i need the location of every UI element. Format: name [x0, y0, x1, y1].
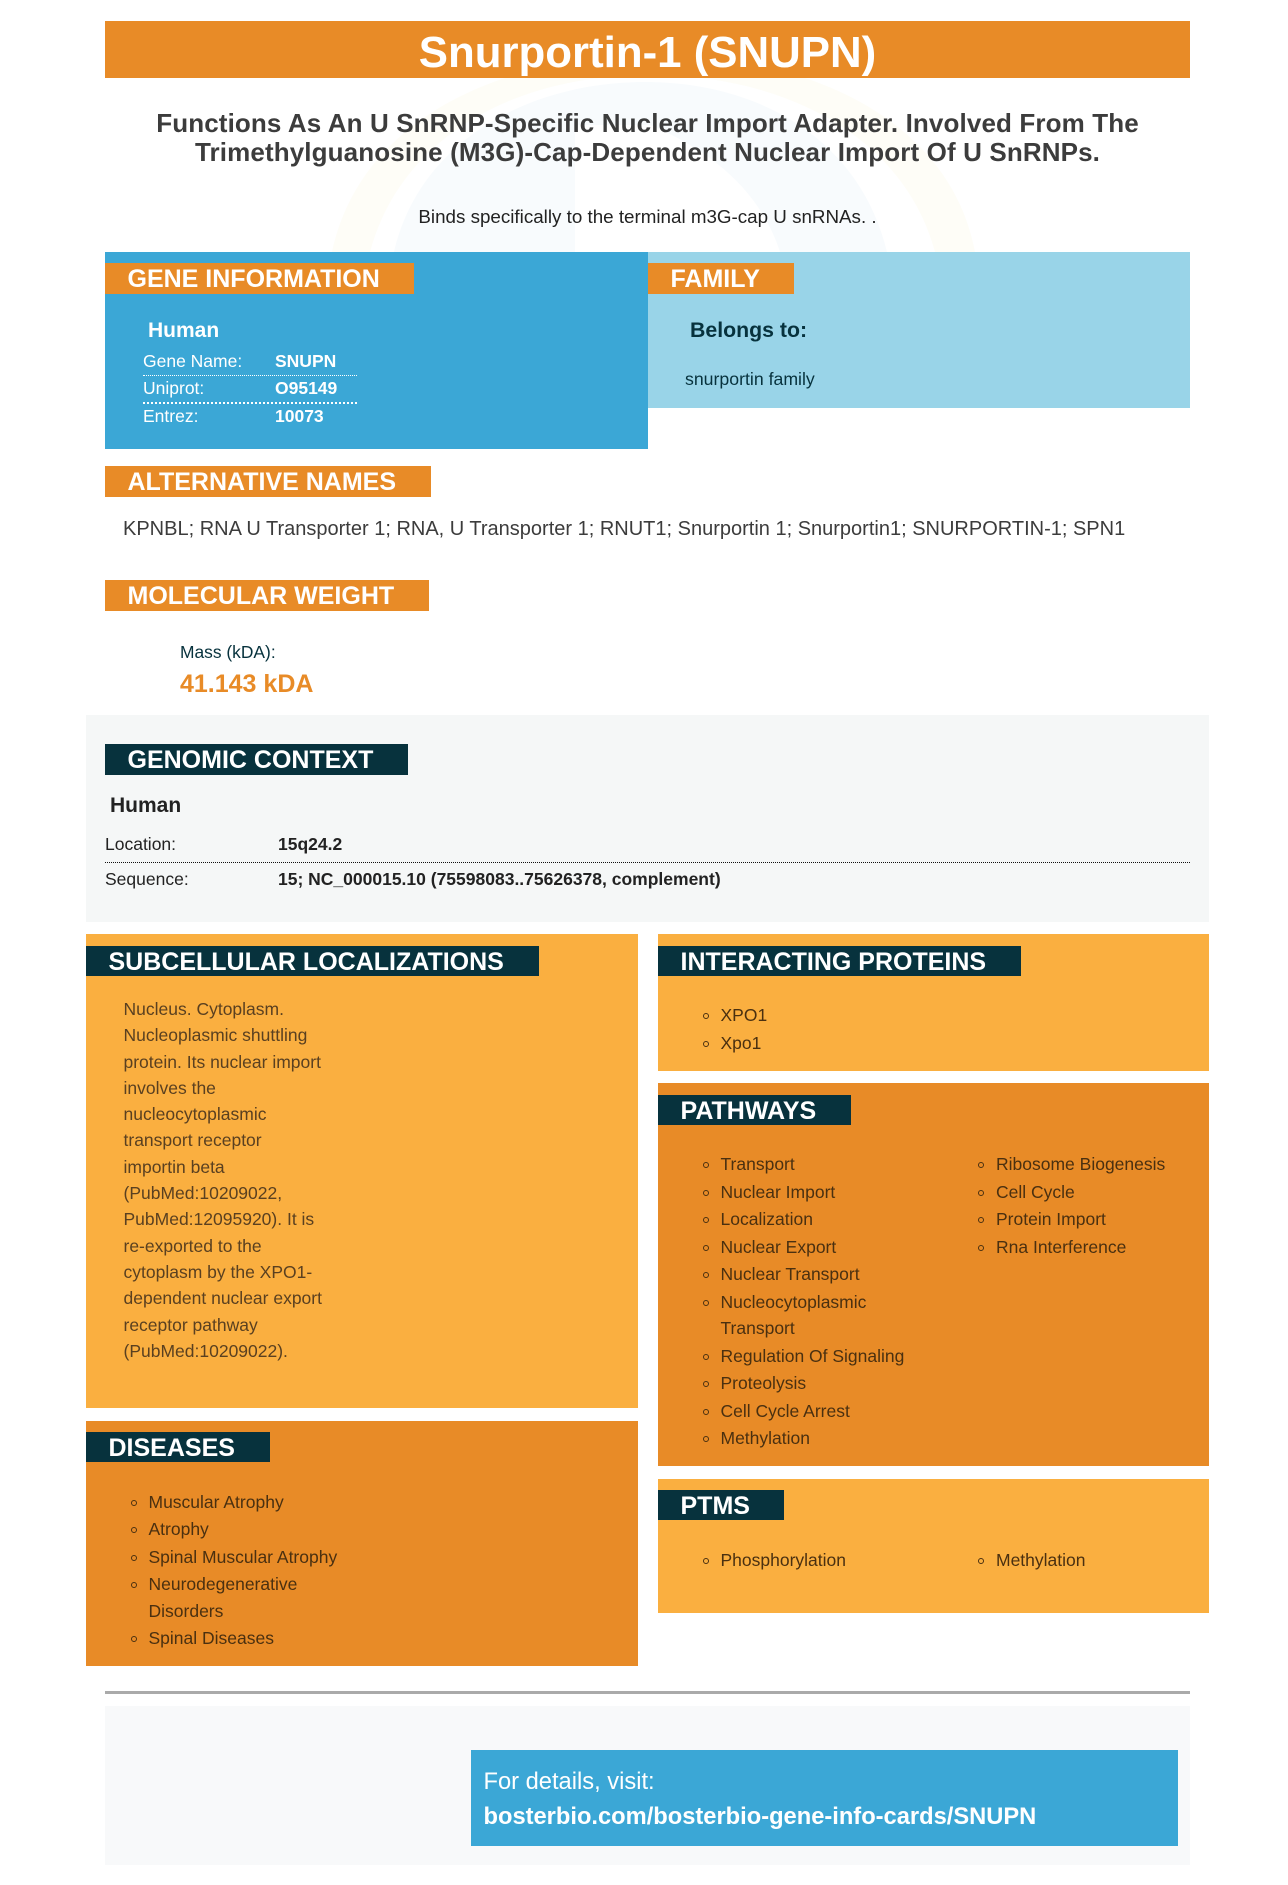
- heading: gene information: GENE INFORMATION: [128, 265, 380, 293]
- heading: family: [648, 263, 794, 294]
- heading: family: FAMILY: [670, 265, 760, 293]
- heading: pathways: PATHWAYS: [680, 1097, 816, 1125]
- gene rows: O95149: [275, 378, 337, 398]
- localization text: involves the: [124, 1078, 216, 1098]
- subtitle: [156, 108, 1139, 166]
- pathway list column 1: Nuclear Export: [720, 1237, 836, 1257]
- callout url: bosterbio.com/bosterbio-gene-info-cards/SNUPN: [484, 1804, 1036, 1830]
- heading: pathways: [658, 1095, 851, 1125]
- protein list: XPO1: [720, 1005, 767, 1025]
- pathway list column 1: Transport: [720, 1154, 795, 1174]
- pathway list column 1: Proteolysis: [720, 1373, 806, 1393]
- ptm item 2: Methylation: [996, 1550, 1086, 1570]
- panel: diseases: [86, 1421, 638, 1666]
- panel: ptms: [658, 1479, 1209, 1613]
- disease list: Disorders: [148, 1601, 223, 1621]
- mass label: Mass (kDA):: [180, 642, 276, 662]
- family name: snurportin family: [685, 369, 815, 389]
- pathway list column 1: Nuclear Transport: [720, 1264, 860, 1284]
- pathway list column 1: Nuclear Import: [720, 1182, 835, 1202]
- pathway list column 1: Regulation Of Signaling: [720, 1346, 904, 1366]
- localization text: (PubMed:10209022).: [124, 1341, 288, 1361]
- disease list: Muscular Atrophy: [148, 1492, 284, 1512]
- disease list: Atrophy: [148, 1519, 209, 1539]
- gene rows: SNUPN: [275, 351, 336, 371]
- localization text: dependent nuclear export: [124, 1288, 322, 1308]
- pathway list column 1: [703, 1154, 904, 1448]
- callout: details link: [471, 1750, 1178, 1846]
- heading: alternative names: ALTERNATIVE NAMES: [128, 468, 396, 496]
- heading: molecular weight: MOLECULAR WEIGHT: [128, 582, 394, 610]
- localization text: transport receptor: [124, 1130, 262, 1150]
- location row: Location:: [105, 834, 176, 854]
- panel: family: [648, 252, 1190, 408]
- species: Human: [148, 319, 219, 342]
- mass value: 41.143 kDA: [180, 670, 313, 698]
- protein list: [703, 1005, 767, 1053]
- disease list: [131, 1492, 338, 1648]
- heading: subcellular localizations: SUBCELLULAR LOCALIZATIONS: [108, 948, 504, 976]
- pathway list column 2: Rna Interference: [996, 1237, 1126, 1257]
- title banner: Snurportin-1 (SNUPN): [419, 28, 876, 77]
- localization text: [124, 999, 322, 1361]
- disease list: Spinal Muscular Atrophy: [148, 1547, 337, 1567]
- ptm item 1: Phosphorylation: [720, 1550, 846, 1570]
- panel: footer: [105, 1706, 1190, 1865]
- subtitle: Trimethylguanosine (M3G)-Cap-Dependent Nuclear Import Of U SnRNPs.: [195, 136, 1100, 166]
- gene rows: Uniprot:: [143, 378, 204, 398]
- heading: ptms: [658, 1490, 784, 1520]
- pathway list column 2: Protein Import: [996, 1209, 1106, 1229]
- pathway list column 2: Cell Cycle: [996, 1182, 1075, 1202]
- localization text: Nucleus. Cytoplasm.: [124, 999, 284, 1019]
- localization text: PubMed:12095920). It is: [124, 1209, 314, 1229]
- gene rows: 10073: [275, 406, 324, 426]
- localization text: receptor pathway: [124, 1315, 258, 1335]
- belongs to label: Belongs to:: [690, 318, 807, 342]
- localization text: cytoplasm by the XPO1-: [124, 1262, 312, 1282]
- localization text: (PubMed:10209022,: [124, 1183, 282, 1203]
- gene rows: Entrez:: [143, 406, 198, 426]
- localization text: protein. Its nuclear import: [124, 1052, 321, 1072]
- panel: interacting proteins: [658, 934, 1209, 1071]
- localization text: Nucleoplasmic shuttling: [124, 1025, 307, 1045]
- pathway list column 2: [978, 1154, 1165, 1257]
- disease list: Spinal Diseases: [148, 1628, 274, 1648]
- pathway list column 1: Methylation: [720, 1428, 810, 1448]
- panel: genomic context: [86, 715, 1209, 922]
- gene rows: [143, 351, 357, 426]
- panel: gene information: [105, 252, 648, 449]
- heading: diseases: [86, 1432, 270, 1462]
- localization text: re-exported to the: [124, 1236, 262, 1256]
- localization text: importin beta: [124, 1157, 225, 1177]
- heading: interacting proteins: INTERACTING PROTEINS: [680, 948, 986, 976]
- heading: diseases: DISEASES: [108, 1434, 235, 1462]
- species: Human: [110, 794, 181, 817]
- location row: 15q24.2: [278, 834, 342, 854]
- gene rows: Gene Name:: [143, 351, 242, 371]
- location row: [105, 834, 1190, 863]
- heading: genomic context: GENOMIC CONTEXT: [128, 746, 373, 774]
- watermark logo: [0, 0, 1288, 252]
- title banner: [105, 21, 1190, 78]
- pathway list column 1: Transport: [720, 1318, 795, 1338]
- pathway list column 1: Nucleocytoplasmic: [720, 1292, 866, 1312]
- alternative names text: KPNBL; RNA U Transporter 1; RNA, U Transporter 1; RNUT1; Snurportin 1; Snurportin1; SNURPORTIN-1; SPN1: [123, 518, 1125, 540]
- protein list: Xpo1: [720, 1033, 761, 1053]
- pathway list column 1: Localization: [720, 1209, 813, 1229]
- panel: pathways: [658, 1083, 1209, 1466]
- disease list: Neurodegenerative: [148, 1574, 297, 1594]
- localization text: nucleocytoplasmic: [124, 1104, 266, 1124]
- sequence row: Sequence:: [105, 869, 189, 889]
- sequence row: 15; NC_000015.10 (75598083..75626378, complement): [278, 869, 721, 889]
- pathway list column 2: Ribosome Biogenesis: [996, 1154, 1165, 1174]
- heading: ptms: PTMS: [680, 1492, 750, 1520]
- pathway list column 1: Cell Cycle Arrest: [720, 1401, 850, 1421]
- description: Binds specifically to the terminal m3G-cap U snRNAs. .: [418, 206, 877, 227]
- panel: subcellular localizations: [86, 934, 638, 1408]
- subtitle: Functions As An U SnRNP-Specific Nuclear Import Adapter. Involved From The: [156, 108, 1139, 138]
- callout label: For details, visit:: [484, 1769, 655, 1795]
